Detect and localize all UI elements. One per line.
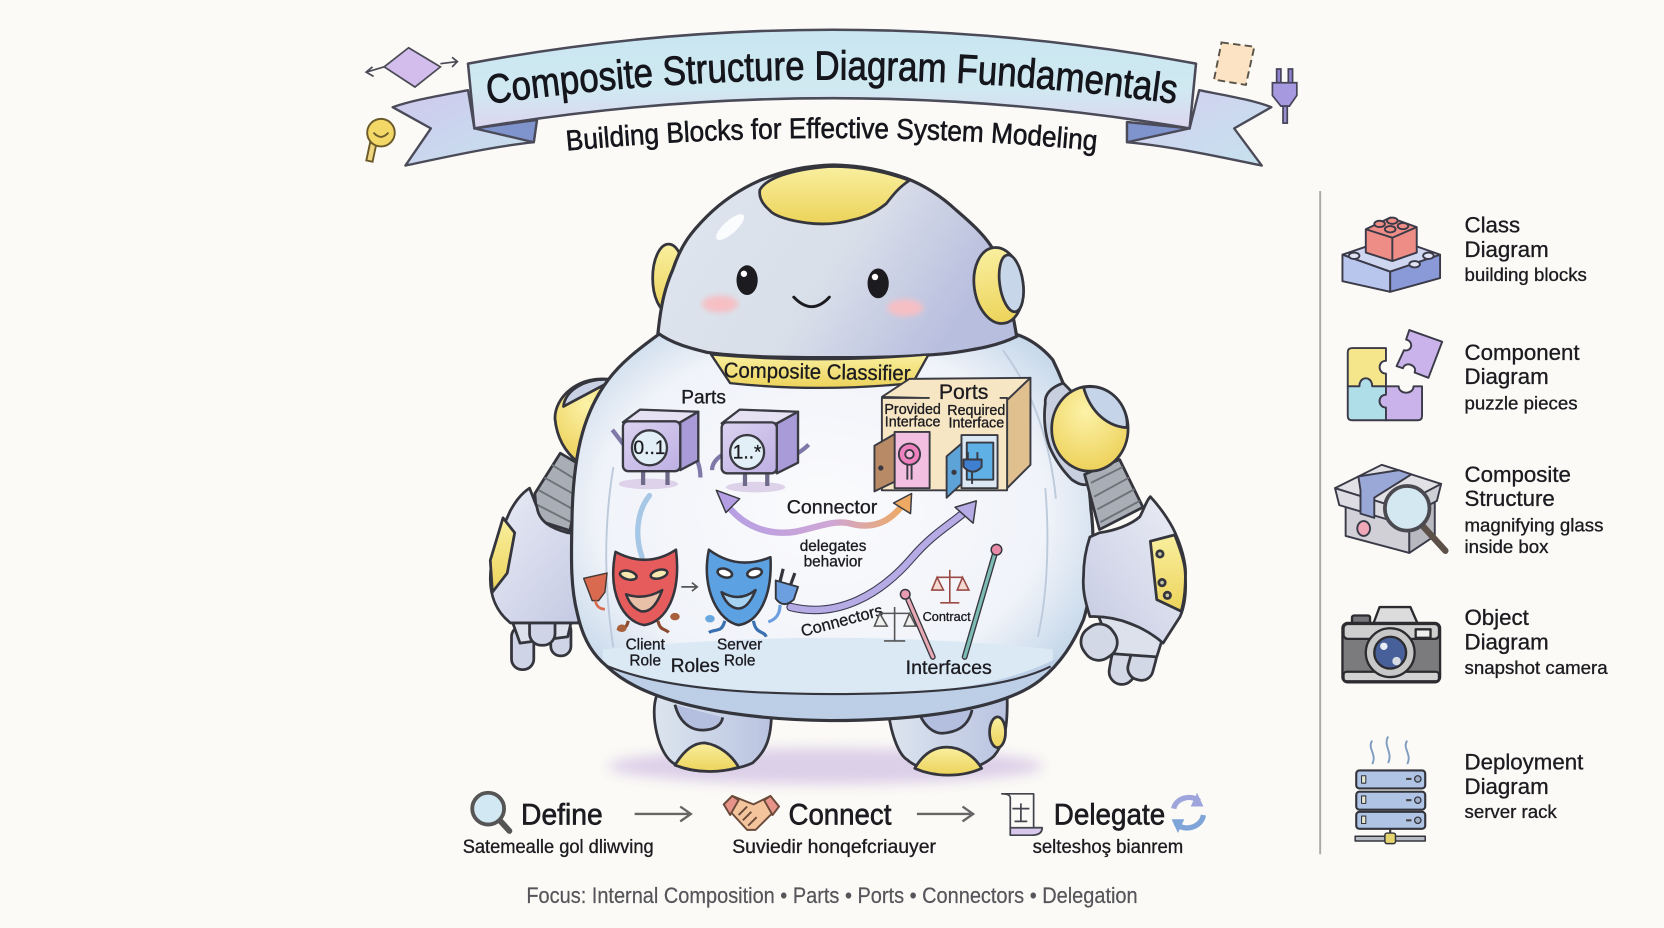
part cube 1..*: 1..* (733, 442, 762, 463)
server role label: Role (724, 652, 755, 669)
composite structure note: inside box (1464, 536, 1549, 557)
right shoulder ball (1052, 386, 1128, 471)
blue link from parts to client role (638, 496, 649, 557)
icon: handshake (724, 796, 779, 830)
arrow: connect to delegate (917, 807, 973, 821)
ports box (874, 378, 1030, 498)
composite structure item (1335, 462, 1603, 557)
connect caption: Suviedir honqefcriauyer (732, 837, 937, 858)
provided interface label: Provided (884, 402, 941, 418)
class diagram note: building blocks (1464, 264, 1587, 285)
ports heading: Ports (939, 381, 988, 404)
left ear (653, 244, 684, 312)
component diagram item (1348, 330, 1580, 420)
component diagram label: Diagram (1464, 364, 1549, 389)
process row (463, 793, 1203, 858)
delegates behavior label: delegates (800, 538, 867, 555)
object diagram label: Diagram (1464, 629, 1549, 654)
icon: server rack (1355, 770, 1425, 844)
provided interface label: Interface (885, 415, 941, 431)
class diagram item (1342, 212, 1587, 292)
banner right tail (1127, 90, 1271, 166)
right forearm (1083, 497, 1186, 643)
robot head (658, 165, 1017, 358)
icon: building blocks (1342, 218, 1440, 292)
parts heading: Parts (681, 387, 726, 408)
icon: steam (1371, 736, 1409, 764)
server role blue mask (705, 550, 771, 637)
right ear (969, 244, 1028, 327)
connect step (724, 796, 937, 858)
component diagram label: Component (1464, 340, 1580, 365)
left shoulder (555, 379, 626, 463)
deployment diagram label: Diagram (1464, 774, 1549, 799)
banner left tail (393, 90, 537, 166)
deployment diagram label: Deployment (1464, 749, 1584, 774)
connect heading: Connect (788, 799, 892, 832)
delegate step (1002, 793, 1203, 858)
right arm in front of body (1044, 383, 1186, 686)
define heading: Define (521, 799, 603, 832)
delegates behavior label: behavior (804, 554, 863, 571)
icon: puzzle pieces (1348, 330, 1442, 420)
required interface label: Required (947, 403, 1005, 419)
composite classifier label: Composite Classifier (724, 359, 911, 385)
title banner (392, 28, 1272, 167)
deployment diagram note: server rack (1464, 801, 1557, 822)
icon: magnifying glass over box (1335, 465, 1445, 553)
contract label: Contract (923, 609, 971, 624)
icon: magnifying glass (472, 793, 509, 831)
focus line: Focus: Internal Composition • Parts • Ports • Connectors • Delegation (526, 883, 1138, 908)
define caption: Satemealle gol dliwving (463, 837, 654, 858)
robot face (702, 265, 923, 316)
icon: purple plug (1272, 69, 1297, 123)
left hand (509, 610, 573, 670)
yellow head cap (760, 166, 909, 224)
small arrow between roles (681, 583, 697, 591)
ground shadow (608, 748, 1043, 784)
right related diagrams panel (1320, 191, 1608, 854)
interfaces group (874, 544, 1002, 679)
left arm behind body (490, 379, 626, 670)
contract scale left (874, 607, 916, 641)
icon: contract scroll (1002, 794, 1042, 835)
component diagram note: puzzle pieces (1464, 393, 1578, 414)
left forearm (490, 488, 594, 623)
blue plug (768, 569, 798, 622)
client role red mask (613, 550, 680, 632)
right hand (1075, 610, 1163, 686)
icon: purple diamond with arrows (366, 48, 457, 87)
required interface label: Interface (948, 416, 1004, 432)
delegation arrow to required port (791, 501, 976, 610)
left forearm yellow patch (490, 518, 515, 592)
right foot (888, 695, 1007, 775)
icon: snapshot camera (1342, 607, 1440, 682)
required door with plug (947, 435, 998, 498)
left foot (654, 695, 772, 771)
class diagram label: Class (1464, 212, 1520, 237)
short interface stick (900, 590, 933, 657)
right arm joint (1085, 460, 1143, 530)
roles group (584, 550, 798, 677)
object diagram label: Object (1464, 605, 1530, 630)
interfaces heading: Interfaces (906, 657, 992, 679)
provided door with target (874, 432, 930, 491)
server role label: Server (717, 636, 762, 653)
object diagram note: snapshot camera (1464, 657, 1608, 678)
banner main ribbon (468, 30, 1196, 128)
icon: refresh arrows (1172, 793, 1203, 833)
subtitle text: Building Blocks for Effective System Modeling (566, 117, 1096, 156)
client role label: Client (626, 636, 666, 653)
class diagram label: Diagram (1464, 237, 1549, 262)
robot feet (654, 695, 1007, 775)
connectors label: Connectors (799, 602, 885, 641)
client role label: Role (629, 652, 661, 669)
connector label: Connector (787, 497, 878, 519)
delegate heading: Delegate (1054, 799, 1165, 832)
deployment diagram item (1355, 736, 1584, 844)
roles heading: Roles (671, 656, 720, 677)
title text: Composite Structure Diagram Fundamentals (487, 50, 1177, 104)
robot mascot (490, 165, 1186, 784)
part cube 1..* (712, 410, 809, 492)
composite structure note: magnifying glass (1464, 515, 1603, 536)
part cube 0..1: 0..1 (634, 438, 665, 459)
icon: yellow smiley lens (366, 119, 395, 162)
icon: dashed peach box (1214, 42, 1254, 85)
small red cup (584, 573, 607, 609)
robot body glass (562, 331, 1093, 732)
composite structure label: Composite (1464, 462, 1571, 487)
long interface stick (965, 544, 1002, 657)
right shoulder mount (1044, 383, 1104, 485)
part cube 0..1 (612, 410, 700, 489)
parts group (612, 387, 809, 492)
left arm joint (535, 453, 584, 531)
define step (463, 793, 654, 858)
object diagram item (1342, 605, 1608, 682)
composite structure label: Structure (1464, 486, 1555, 511)
contract scale right (932, 570, 969, 603)
right forearm plate (1150, 535, 1185, 611)
delegate caption: selteshoş bianrem (1033, 837, 1183, 858)
connector arrow between parts and ports (716, 490, 912, 533)
arrow: define to connect (635, 807, 691, 821)
